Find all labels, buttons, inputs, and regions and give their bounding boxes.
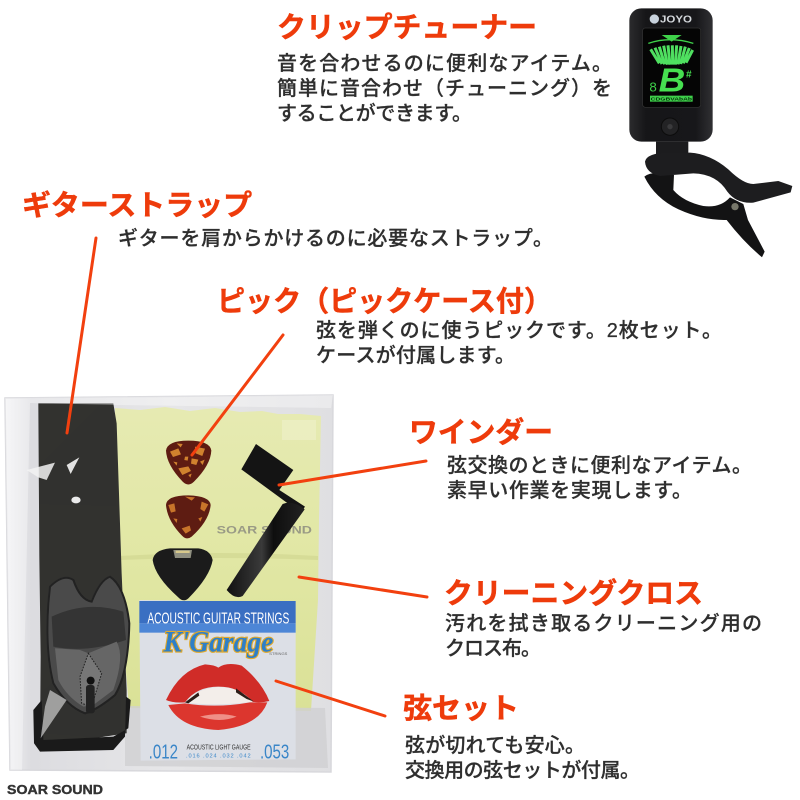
copyright mark: SOAR SOUND [7,782,103,797]
text: pick description [316,319,722,367]
package title: ACOUSTIC GUITAR STRINGS [147,610,289,627]
strap leather end [47,577,129,713]
text: clip tuner description: することができます。 [277,102,472,125]
bag sheen [5,395,333,770]
heading: guitar strap: ギターストラップ [22,190,252,222]
heading: string set: 弦セット [403,693,519,725]
pick 2 [166,495,211,538]
guitar strap [27,403,131,752]
text: winder description: 素早い作業を実現します。 [447,479,692,502]
heading: clip tuner: クリップチューナー [277,12,537,44]
text: pick description: 弦を弾くのに使うピックです。2枚セット。 [316,319,722,342]
text: clip tuner description: 簡単に音合わせ（チューニング）を [277,77,612,100]
tuner display: B [659,63,685,100]
text: cleaning cloth description: クロス布。 [445,637,541,660]
heading: winder: ワインダー [409,416,553,449]
text: clip tuner description [277,52,612,125]
tuner display: CDGBVAbAb [651,96,692,101]
arrow: pick [192,335,283,455]
text: string set description [405,734,640,782]
tuner display: 8 [649,79,657,94]
brand suffix: STRINGS [269,652,288,656]
high gauge: .053 [260,741,289,763]
heading: pick: ピック（ピックケース付） [217,286,552,318]
text: cleaning cloth description [445,612,762,660]
arrow: cleaning cloth [299,577,427,597]
plastic bag [5,395,333,772]
gauge label: ACOUSTIC LIGHT GAUGE [187,744,251,751]
pick 1 [166,441,211,484]
text: cleaning cloth description: 汚れを拭き取るクリーニング用の [445,612,762,635]
watermark: SOAR SOUND [217,524,312,536]
text: clip tuner description: 音を合わせるのに便利なアイテム。 [277,52,612,75]
gauge list: .016 .024 .032 .042 [186,753,251,759]
shadowed bag area under cloth [125,706,328,768]
string winder [227,444,305,597]
text: string set description: 弦が切れても安心。 [405,734,585,757]
tuner display [648,35,693,102]
lips [166,664,269,730]
arrow: string set [276,681,385,716]
pick case [153,548,213,600]
icon: clip tuner [629,8,792,257]
product photo: plastic bag with accessories [5,395,333,772]
text: string set description: 交換用の弦セットが付属。 [405,759,640,782]
tuner brand: JOYO [660,14,692,25]
text: guitar strap description: ギターを肩からかけるのに必要なストラップ。 [118,227,553,250]
low gauge: .012 [149,741,178,763]
text: pick description: ケースが付属します。 [316,344,515,367]
text: winder description [447,454,752,502]
guitar picks and accessories [153,441,312,600]
tuner display: # [686,69,692,80]
arrow: guitar strap [67,238,96,433]
heading: cleaning cloth: クリーニングクロス [444,577,703,610]
arrow: winder [279,461,426,485]
text: winder description: 弦交換のときに便利なアイテム。 [447,454,752,477]
cleaning cloth [115,407,321,711]
string set package [139,600,296,763]
brand logo: K'Garage [162,627,273,659]
